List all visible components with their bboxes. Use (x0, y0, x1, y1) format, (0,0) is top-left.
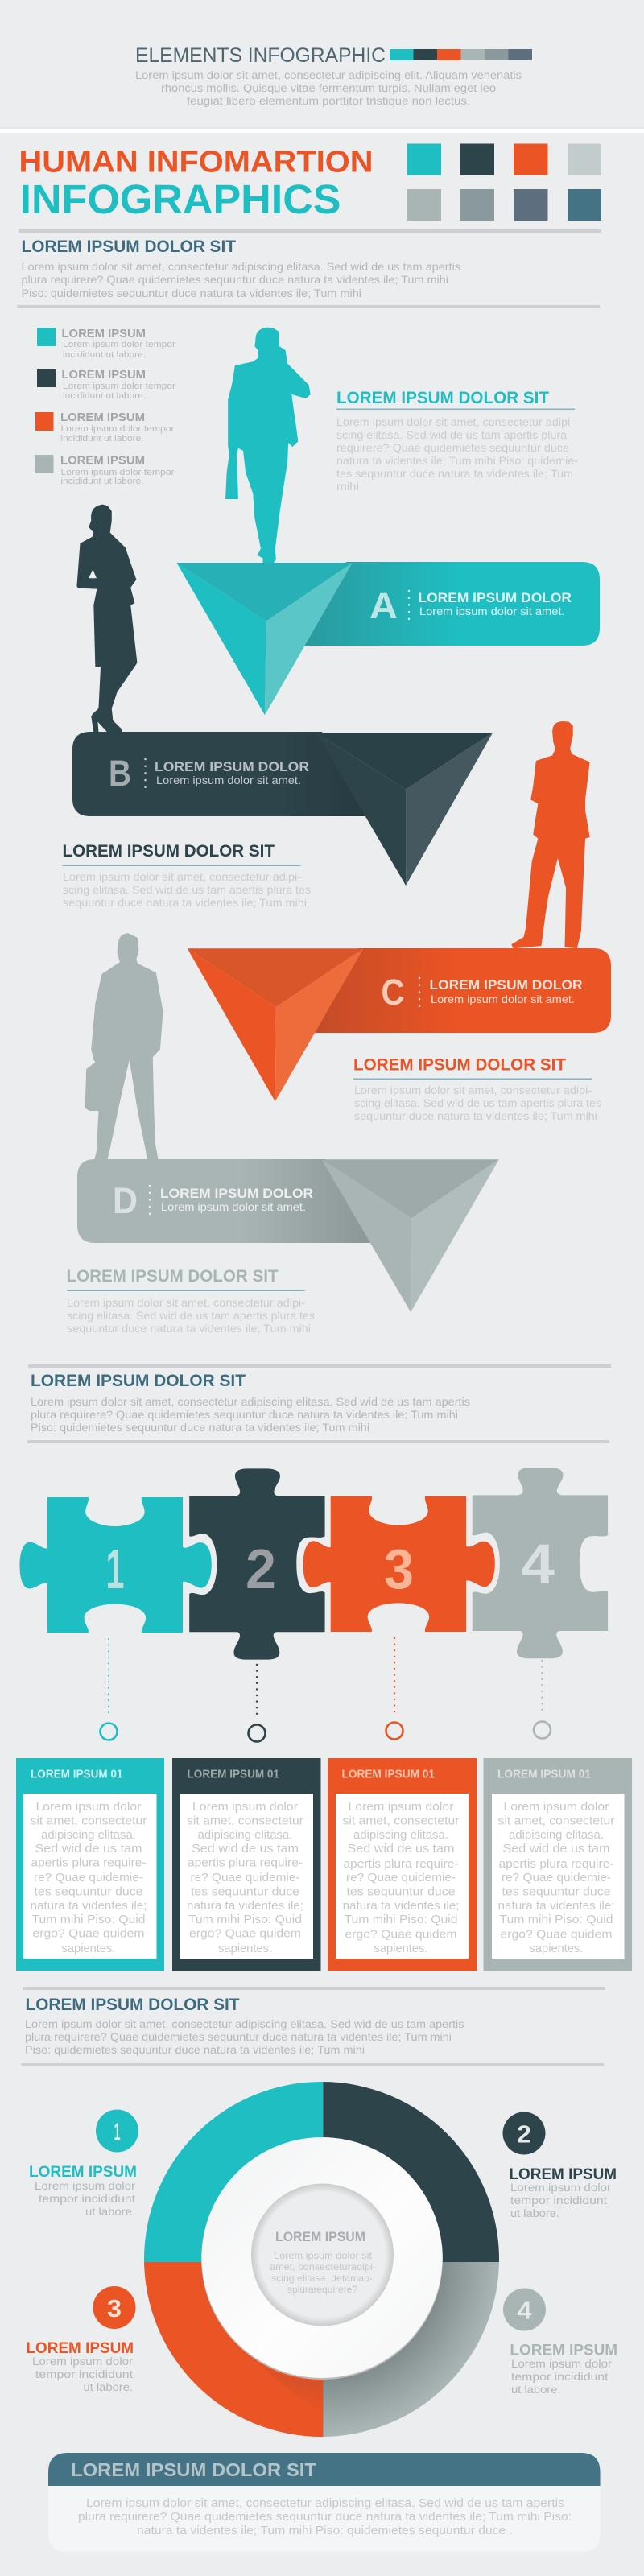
dark body (63, 871, 311, 909)
legend item 4: Lorem ipsum dolor tempor (61, 468, 175, 477)
pyramid D (322, 1159, 499, 1312)
banner D (77, 1159, 499, 1312)
title line 2: INFOGRAPHICS (19, 176, 341, 222)
section three intro (21, 1987, 605, 2066)
card 2 text: natura ta videntes ile; (187, 1899, 303, 1913)
legend item 1: incididunt ut labore. (63, 350, 146, 360)
card 1 text: sapientes. (61, 1942, 116, 1955)
legend item 3 (35, 411, 175, 444)
card 3 text (343, 1800, 459, 1955)
badge 1: 1 (114, 2117, 121, 2146)
card 2 (172, 1758, 320, 1971)
orange heading: LOREM IPSUM DOLOR SIT (353, 1056, 566, 1074)
number 3: 3 (384, 1538, 414, 1600)
footer panel (48, 2453, 601, 2552)
banner B (72, 732, 493, 886)
card 1 title: LOREM IPSUM 01 (31, 1768, 122, 1781)
label 3 (26, 2340, 134, 2393)
legend item 1: Lorem ipsum dolor tempor (63, 340, 175, 349)
section three text: plura requirere? Quae quidemietes sequuntur duce natura ta videntes ile; Tum mihi (25, 2031, 452, 2043)
inner disc (201, 2137, 443, 2378)
card 2 title: LOREM IPSUM 01 (187, 1768, 279, 1781)
banner B: Lorem ipsum dolor sit amet. (156, 774, 301, 786)
legend item 4: LOREM IPSUM (60, 454, 145, 467)
main title (19, 145, 374, 222)
section three text: Lorem ipsum dolor sit amet, consectetur adipiscing elitasa. Sed wid de us tam apertis (25, 2018, 464, 2030)
label 2: LOREM IPSUM (509, 2166, 617, 2183)
card 4 (483, 1758, 632, 1971)
banner A label: LOREM IPSUM DOLOR (419, 590, 572, 605)
teal body: Lorem ipsum dolor sit amet, consectetur adipi- (336, 416, 574, 428)
section two text: plura requirere? Quae quidemietes sequuntur duce natura ta videntes ile; Tum mihi (31, 1409, 458, 1421)
card 4 text: sapientes. (530, 1942, 583, 1955)
segment orange (144, 2262, 324, 2437)
card 1 text: apertis plura require- (31, 1856, 147, 1869)
section three heading: LOREM IPSUM DOLOR SIT (26, 1996, 240, 2014)
card 2 text: re? Quae quidemie- (190, 1871, 300, 1885)
card 3 text: re? Quae quidemie- (346, 1871, 456, 1885)
card 2 text: sit amet, consectetur (187, 1814, 303, 1827)
connector 3 (386, 1638, 402, 1739)
card 4 text: tes sequuntur duce (502, 1885, 610, 1898)
card 3 text: adipiscing elitasa. (353, 1828, 448, 1842)
grey text block (66, 1267, 315, 1335)
label 4: tempor incididunt (511, 2371, 609, 2383)
puzzle piece 2 (189, 1468, 325, 1660)
card 2 text: Lorem ipsum dolor (192, 1800, 298, 1814)
section three text (25, 2018, 464, 2056)
card 4 text: sit amet, consectetur (497, 1814, 615, 1827)
section three text: Piso: quidemietes sequuntur duce natura ta videntes ile; Tum mihi (25, 2044, 365, 2056)
label 3: ut labore. (84, 2381, 133, 2393)
card 1 (16, 1758, 164, 1971)
label 3: tempor incididunt (35, 2368, 133, 2380)
footer heading: LOREM IPSUM DOLOR SIT (71, 2459, 317, 2480)
card 1 text: Sed wid de us tam (35, 1842, 142, 1856)
legend item 4 (35, 454, 175, 486)
card 2 text: Sed wid de us tam (192, 1842, 299, 1856)
banner D label: LOREM IPSUM DOLOR (160, 1186, 313, 1201)
card 1 text: ergo? Quae quidem (32, 1927, 145, 1940)
badge 3: 3 (107, 2294, 122, 2322)
legend item 3: LOREM IPSUM (60, 411, 145, 424)
colour strip (390, 49, 532, 60)
legend (35, 327, 175, 486)
letter D: D (113, 1180, 138, 1221)
card 4 text: apertis plura require- (499, 1857, 613, 1871)
card 3 text: Tum mihi Piso: Quid (345, 1913, 457, 1926)
card 1 text: Tum mihi Piso: Quid (32, 1913, 145, 1926)
banner A (176, 562, 600, 715)
label 1 (29, 2164, 137, 2218)
header description: Lorem ipsum dolor sit amet, consectetur adipiscing elit. Aliquam venenatis (135, 69, 522, 81)
segment grey (324, 2262, 499, 2437)
grey body: scing elitasa. Sed wid de us tam apertis plura tes (67, 1310, 315, 1322)
pyramid A (176, 563, 353, 715)
dark body: scing elitasa. Sed wid de us tam apertis plura tes (63, 884, 311, 896)
label 1: LOREM IPSUM (29, 2164, 137, 2181)
number 1: 1 (106, 1538, 124, 1600)
label 2: tempor incididunt (510, 2194, 607, 2207)
intro section (18, 229, 601, 308)
card 4 text: Sed wid de us tam (502, 1842, 610, 1856)
card 4 text (497, 1800, 615, 1955)
label 1: ut labore. (85, 2206, 135, 2218)
card 1 text (31, 1800, 147, 1955)
teal heading: LOREM IPSUM DOLOR SIT (336, 389, 549, 407)
letter C: C (382, 972, 404, 1013)
section two text: Lorem ipsum dolor sit amet, consectetur adipiscing elitasa. Sed wid de us tam apertis (31, 1396, 470, 1408)
badge 2: 2 (517, 2120, 531, 2148)
section two text: Piso: quidemietes sequuntur duce natura ta videntes ile; Tum mihi (31, 1422, 369, 1434)
card 2 text: ergo? Quae quidem (189, 1927, 301, 1940)
section two text (31, 1396, 470, 1434)
card 1 text: Lorem ipsum dolor (35, 1800, 142, 1814)
grey body: Lorem ipsum dolor sit amet, consectetur adipi- (67, 1297, 305, 1309)
title line 1: HUMAN INFOMARTION (19, 145, 374, 179)
card 4 text: natura ta videntes ile; (497, 1899, 615, 1913)
legend item 1: LOREM IPSUM (61, 327, 146, 341)
intro heading: LOREM IPSUM DOLOR SIT (21, 237, 236, 256)
card 3 text: natura ta videntes ile; (343, 1899, 459, 1913)
connector 2 (248, 1665, 266, 1742)
dark heading: LOREM IPSUM DOLOR SIT (63, 842, 275, 861)
label 4: ut labore. (511, 2384, 560, 2396)
puzzle piece 4 (473, 1468, 608, 1658)
dark text block (63, 842, 311, 909)
badge 3 (93, 2286, 135, 2329)
puzzle piece 1 (19, 1497, 212, 1633)
number 2: 2 (246, 1538, 276, 1600)
card 4 text: Tum mihi Piso: Quid (499, 1913, 613, 1926)
card 4 title: LOREM IPSUM 01 (497, 1768, 591, 1781)
card 2 text: tes sequuntur duce (191, 1885, 299, 1898)
header description: feugiat libero elementum porttitor tristique non lectus. (187, 95, 470, 107)
card 1 text: sit amet, consectetur (31, 1814, 147, 1827)
header: elements infographic (135, 44, 532, 107)
badge 4 (503, 2288, 546, 2331)
intro text: plura requirere? Quae quidemietes sequuntur duce natura ta videntes ile; Tum mihi (21, 274, 448, 286)
centre text (270, 2250, 376, 2295)
orange body: sequuntur duce natura ta videntes ile; Tum mihi (354, 1110, 597, 1122)
segment teal (144, 2082, 324, 2262)
badge 4: 4 (517, 2296, 532, 2325)
card 2 text: apertis plura require- (188, 1856, 303, 1869)
colour swatches (407, 143, 601, 221)
centre well (251, 2183, 394, 2326)
footer text: natura ta videntes ile; Tum mihi Piso: quidemietes sequuntur duce . (137, 2524, 513, 2537)
card 2 text (187, 1800, 303, 1955)
section two heading: LOREM IPSUM DOLOR SIT (31, 1372, 246, 1390)
banner C label: LOREM IPSUM DOLOR (430, 977, 583, 993)
figure: orange man (511, 721, 590, 948)
card 3 text: ergo? Quae quidem (345, 1927, 457, 1942)
footer text (78, 2496, 572, 2537)
dark body: Lorem ipsum dolor sit amet, consectetur adipi- (63, 871, 301, 883)
banner B label: LOREM IPSUM DOLOR (155, 759, 309, 774)
label 3: Lorem ipsum dolor (32, 2355, 134, 2368)
card 3 (328, 1758, 477, 1971)
orange body: scing elitasa. Sed wid de us tam apertis plura tes (354, 1097, 601, 1109)
card 3 text: sit amet, consectetur (343, 1814, 459, 1827)
header description (135, 69, 522, 107)
figure: dark woman (76, 505, 137, 733)
orange text block (353, 1056, 601, 1122)
teal body: tes sequuntur duce natura ta videntes ile; Tum (336, 468, 573, 480)
figure: grey man with briefcase (85, 933, 163, 1159)
pyramid C (188, 948, 364, 1101)
label 4: Lorem ipsum dolor (511, 2358, 613, 2370)
header description: rhoncus mollis. Quisque vitae fermentum turpis. Nullam eget leo (161, 82, 496, 94)
centre text: scing elitasa. detamap- (271, 2273, 373, 2284)
label 2: Lorem ipsum dolor (510, 2182, 612, 2194)
card 3 title: LOREM IPSUM 01 (341, 1768, 435, 1781)
pyramid B (316, 733, 493, 886)
teal body: mihi (336, 481, 359, 493)
card 1 text: natura ta videntes ile; (31, 1899, 147, 1913)
banner A: Lorem ipsum dolor sit amet. (419, 605, 565, 617)
figure: teal man on phone (225, 328, 311, 564)
grey body (67, 1297, 315, 1335)
legend item 1 (37, 327, 175, 360)
legend item 4: incididunt ut labore. (61, 477, 143, 486)
connector 4 (534, 1661, 551, 1739)
banner C: Lorem ipsum dolor sit amet. (431, 993, 575, 1005)
card 4 text: ergo? Quae quidem (501, 1927, 612, 1942)
teal text block (336, 389, 578, 493)
grey body: sequuntur duce natura ta videntes ile; Tum mihi (67, 1323, 311, 1335)
centre text: splurarequirere? (287, 2284, 357, 2295)
shadow on orange (203, 2278, 324, 2404)
banner D: Lorem ipsum dolor sit amet. (161, 1200, 306, 1213)
inner disc shadow (201, 2138, 443, 2380)
card 1 text: tes sequuntur duce (34, 1885, 143, 1898)
card 1 text: adipiscing elitasa. (41, 1828, 136, 1842)
teal body: scing elitasa. Sed wid de us tam apertis plura (336, 429, 568, 441)
teal body (336, 416, 578, 493)
label 3: LOREM IPSUM (26, 2340, 134, 2357)
badge 1 (96, 2109, 138, 2153)
card 4 text: adipiscing elitasa. (509, 1828, 604, 1842)
label 2 (509, 2166, 617, 2219)
footer text: plura requirere? Quae quidemietes sequuntur duce natura ta videntes ile; Tum mihi Piso: (78, 2510, 572, 2524)
dark body: sequuntur duce natura ta videntes ile; Tum mihi (63, 897, 307, 909)
orange body (354, 1084, 601, 1122)
card 4 text: Lorem ipsum dolor (504, 1800, 609, 1814)
teal body: requirere? Quae quidemietes sequuntur duce (336, 442, 569, 454)
letter B: B (109, 753, 131, 794)
legend item 3: Lorem ipsum dolor tempor (61, 424, 175, 434)
label 1: tempor incididunt (39, 2193, 135, 2205)
label 2: ut labore. (510, 2207, 559, 2219)
segment dark (324, 2082, 499, 2262)
legend item 2: LOREM IPSUM (61, 368, 146, 382)
card 3 text: tes sequuntur duce (346, 1885, 456, 1898)
legend item 2: Lorem ipsum dolor tempor (63, 382, 175, 391)
connector 1 (100, 1639, 118, 1740)
number 4: 4 (521, 1533, 555, 1596)
label 4: LOREM IPSUM (510, 2343, 617, 2359)
teal body: natura ta videntes ile; Tum mihi Piso: quidemie- (336, 455, 578, 467)
intro text (21, 261, 460, 299)
card 4 text: re? Quae quidemie- (502, 1871, 611, 1885)
card 1 text: re? Quae quidemie- (34, 1871, 143, 1885)
banner C (188, 948, 611, 1101)
puzzle piece 3 (303, 1496, 495, 1632)
card 3 text: sapientes. (374, 1942, 428, 1955)
card 3 text: Lorem ipsum dolor (348, 1800, 454, 1814)
header title: ELEMENTS INFOGRAPHIC (135, 44, 386, 67)
intro text: Piso: quidemietes sequuntur duce natura ta videntes ile; Tum mihi (21, 287, 361, 299)
section two intro (27, 1364, 611, 1443)
label 4 (510, 2343, 617, 2396)
letter A: A (369, 585, 398, 626)
orange body: Lorem ipsum dolor sit amet, consectetur adipi- (354, 1084, 592, 1096)
legend item 2: incididunt ut labore. (63, 391, 146, 401)
intro text: Lorem ipsum dolor sit amet, consectetur adipiscing elitasa. Sed wid de us tam apertis (21, 261, 460, 273)
badge 2 (502, 2112, 546, 2154)
legend item 3: incididunt ut labore. (61, 434, 143, 444)
card 2 text: Tum mihi Piso: Quid (188, 1913, 302, 1926)
centre text: Lorem ipsum dolor sit (274, 2250, 373, 2261)
label 1: Lorem ipsum dolor (35, 2180, 136, 2192)
centre title: LOREM IPSUM (275, 2229, 365, 2244)
card 3 text: Sed wid de us tam (348, 1842, 454, 1856)
footer text: Lorem ipsum dolor sit amet, consectetur adipiscing elitasa. Sed wid de us tam apertis (86, 2496, 564, 2510)
card 3 text: apertis plura require- (343, 1857, 459, 1871)
legend item 2 (37, 368, 175, 401)
donut chart (144, 2082, 499, 2437)
grey heading: LOREM IPSUM DOLOR SIT (66, 1267, 279, 1286)
card 2 text: adipiscing elitasa. (198, 1828, 293, 1842)
centre text: amet, consecteturadipi- (270, 2261, 376, 2273)
card 2 text: sapientes. (218, 1942, 272, 1955)
